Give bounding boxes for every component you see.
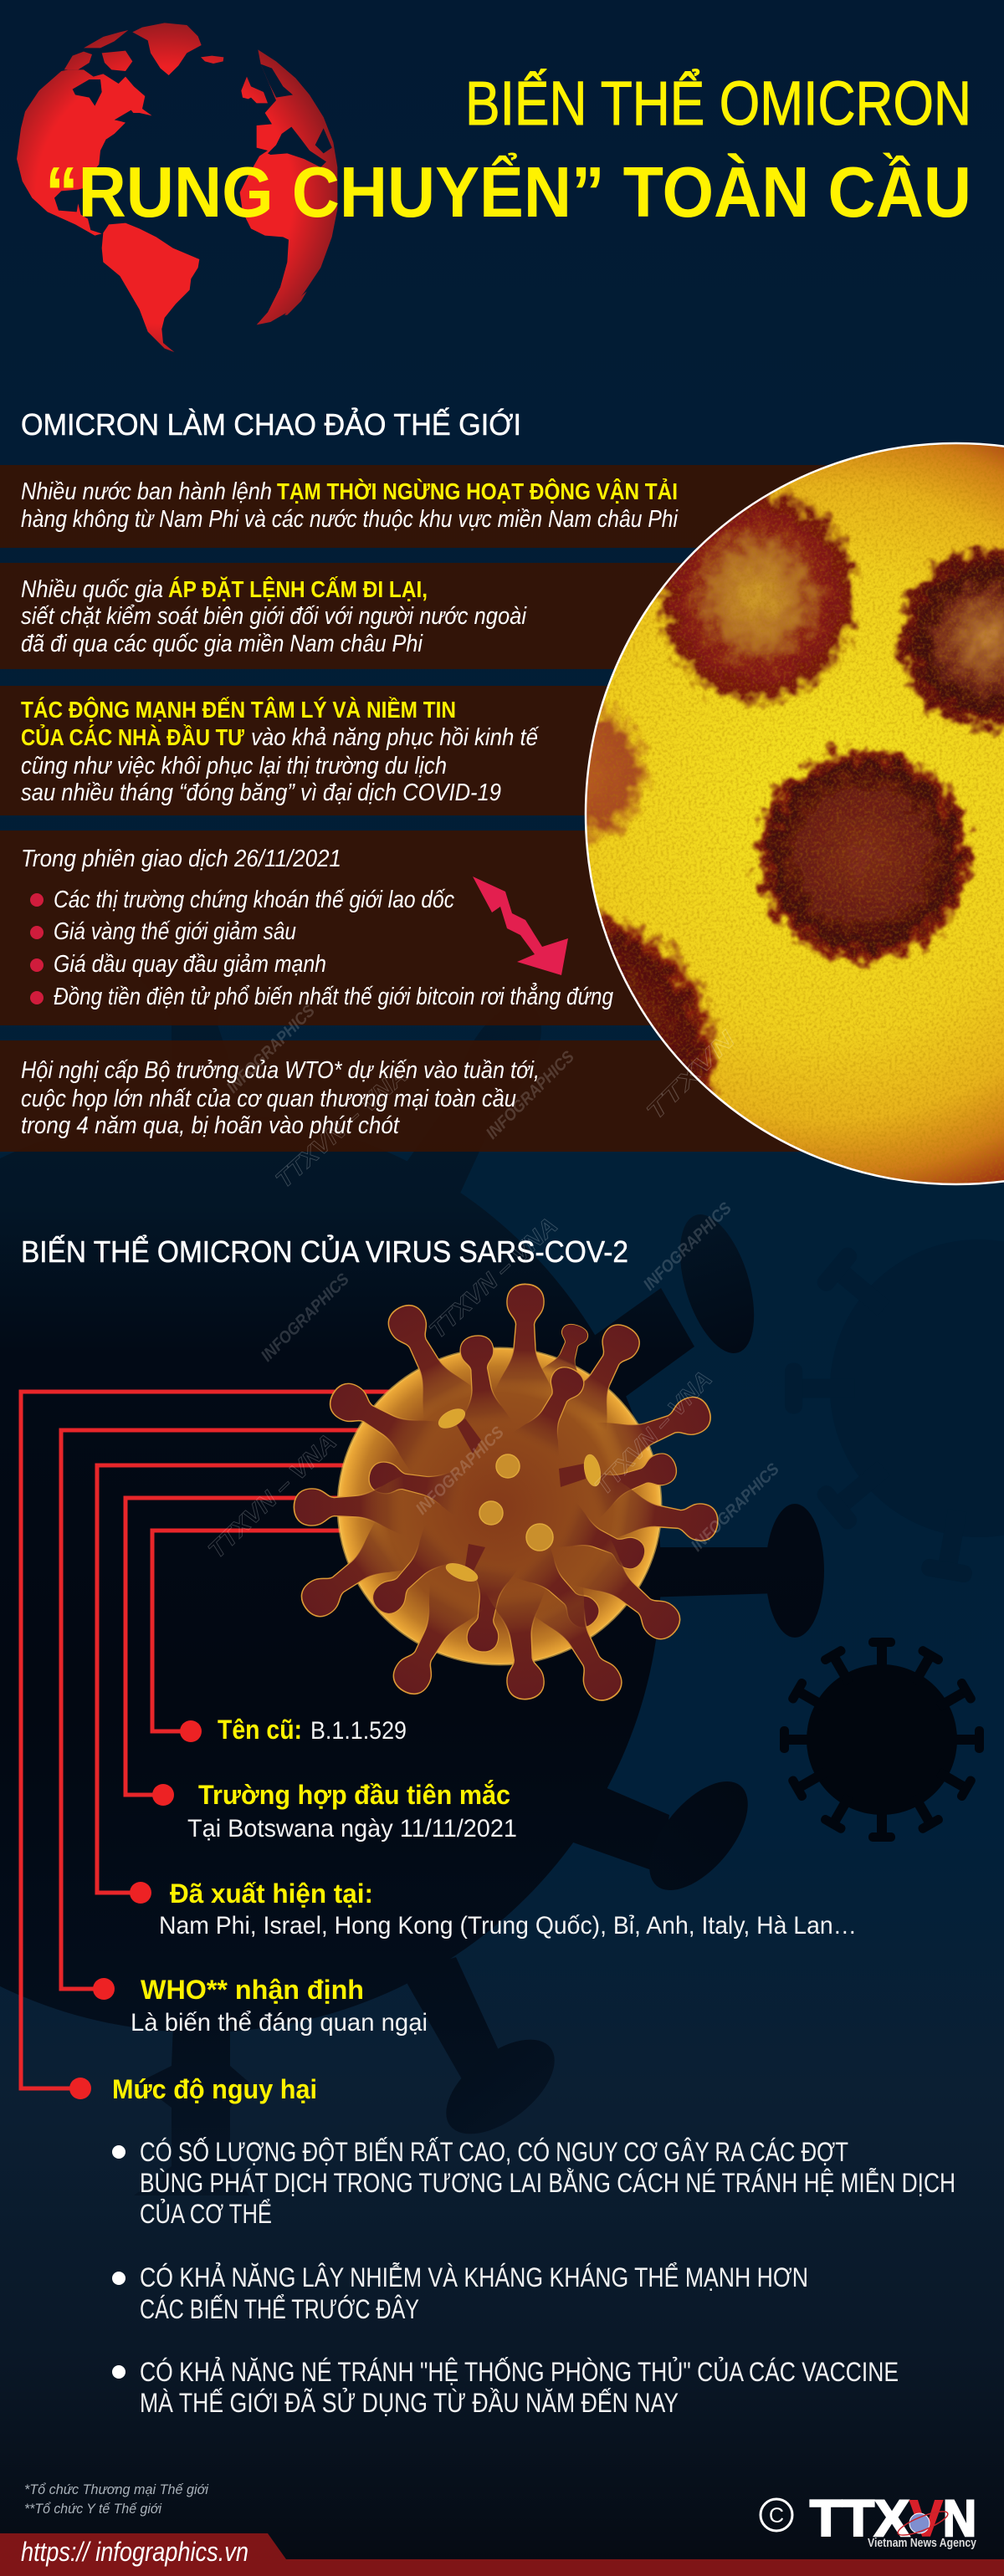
text block: investor confidence: TÁC ĐỘNG MẠNH ĐẾN TÂM LÝ VÀ NIỀM TIN (21, 696, 456, 723)
heading: Omicron làm chao đảo thế giới: OMICRON LÀM CHAO ĐẢO THẾ GIỚI (21, 407, 521, 442)
logo: copyright TTXVN Vietnam News Agency (761, 2490, 977, 2550)
text block: transport suspension (21, 478, 679, 533)
text block: investor confidence: sau nhiều tháng “đóng băng” vì đại dịch COVID-19 (21, 779, 501, 806)
footnotes (24, 2481, 209, 2517)
text block: transport suspension: hàng không từ Nam Phi và các nước thuộc khu vực miền Nam châu Phi (21, 506, 679, 533)
watermarks: TTXVN (641, 1025, 740, 1125)
watermarks: TTXVN – VNA (424, 1212, 562, 1343)
footer url: https:// infographics.vn (21, 2537, 248, 2567)
footnotes: **Tổ chức Y tế Thế giới (24, 2501, 162, 2517)
arrow: falling lightning arrow (473, 877, 568, 975)
background silhouette: small black virus (780, 1638, 984, 1842)
text block: investor confidence: cũng như việc khôi phục lại thị trường du lịch (21, 753, 447, 779)
heading: Biến thể Omicron của virus SARS-CoV-2: BIẾN THỂ OMICRON CỦA VIRUS SARS-COV-2 (21, 1234, 628, 1269)
text block: investor confidence: vào khả năng phục hồi kinh tế (251, 724, 540, 751)
list: danger points: CÓ KHẢ NĂNG LÂY NHIỄM VÀ KHÁNG KHÁNG THỂ MẠNH HƠN (140, 2262, 808, 2292)
text block: transport suspension: TẠM THỜI NGỪNG HOẠT ĐỘNG VẬN TẢI (277, 478, 678, 504)
text block: WTO conference: trong 4 năm qua, bị hoãn vào phút chót (21, 1112, 401, 1139)
label: Mức độ nguy hại: Mức độ nguy hại (112, 2074, 317, 2104)
logo: copyright TTXVN Vietnam News Agency: C (769, 2504, 784, 2527)
text block: WTO conference: Hội nghị cấp Bộ trưởng của WTO* dự kiến vào tuần tới, (21, 1057, 540, 1084)
logo: copyright TTXVN Vietnam News Agency: TTX (810, 2490, 909, 2547)
text block: travel bans: ÁP ĐẶT LỆNH CẤM ĐI LẠI, (168, 576, 428, 602)
label: Trường hợp đầu tiên mắc (152, 1780, 517, 1843)
background silhouette: dim virus, upper right (785, 1239, 1004, 1584)
label: Trường hợp đầu tiên mắc: Trường hợp đầu tiên mắc (198, 1780, 510, 1810)
connector lines from virus to labels (21, 1392, 393, 2088)
list: danger points: CÓ SỐ LƯỢNG ĐỘT BIẾN RẤT CAO, CÓ NGUY CƠ GÂY RA CÁC ĐỢT (140, 2137, 848, 2167)
text block: transport suspension: Nhiều nước ban hành lệnh (21, 478, 272, 505)
label: Tên cũ (180, 1715, 407, 1745)
text block: travel bans: đã đi qua các quốc gia miền Nam châu Phi (21, 631, 423, 657)
text block: travel bans (21, 576, 527, 657)
watermarks: INFOGRAPHICS (412, 1423, 508, 1519)
list: danger points (112, 2137, 955, 2418)
watermarks: INFOGRAPHICS (258, 1270, 353, 1366)
watermarks: TTXVN – VNA (270, 1062, 412, 1193)
footnotes: *Tổ chức Thương mại Thế giới (24, 2481, 209, 2497)
label: Tên cũ: B.1.1.529 (310, 1717, 407, 1745)
text block: WTO conference: cuộc họp lớn nhất của cơ quan thương mại toàn cầu (21, 1086, 516, 1112)
title (45, 69, 971, 233)
text block: trading session list: Giá dầu quay đầu giảm mạnh (54, 951, 326, 978)
text block: trading session list: Đồng tiền điện tử phổ biến nhất thế giới bitcoin rơi thẳng đứng (54, 982, 613, 1010)
label: Trường hợp đầu tiên mắc: Tại Botswana ngày 11/11/2021 (187, 1815, 517, 1843)
footer bar (0, 2533, 1004, 2576)
list: danger points: MÀ THẾ GIỚI ĐÃ SỬ DỤNG TỪ ĐẦU NĂM ĐẾN NAY (140, 2388, 679, 2418)
text block: WTO conference (21, 1057, 540, 1139)
logo: copyright TTXVN Vietnam News Agency: N (943, 2490, 976, 2547)
watermarks (203, 1001, 783, 1563)
photo: coronavirus micrograph in circle (584, 442, 1004, 1186)
label: WHO nhận định (93, 1975, 428, 2037)
text block: investor confidence (21, 696, 540, 806)
label: Đã xuất hiện tại (130, 1878, 857, 1940)
background silhouette: large dark virus (0, 954, 824, 2195)
text block: trading session list: Trong phiên giao dịch 26/11/2021 (21, 846, 341, 872)
label: Đã xuất hiện tại: Nam Phi, Israel, Hong Kong (Trung Quốc), Bỉ, Anh, Italy, Hà Lan… (159, 1912, 857, 1940)
text block: trading session list (21, 846, 613, 1010)
label: WHO nhận định: WHO** nhận định (141, 1975, 364, 2005)
watermarks: INFOGRAPHICS (688, 1459, 783, 1556)
watermarks: TTXVN – VNA (203, 1429, 341, 1563)
list: danger points: CỦA CƠ THỂ (140, 2199, 272, 2229)
label: Đã xuất hiện tại: Đã xuất hiện tại: (170, 1878, 373, 1909)
watermarks: TTXVN – VNA (590, 1366, 717, 1500)
icon: red globe (17, 23, 337, 352)
text block: trading session list: Giá vàng thế giới giảm sâu (54, 918, 296, 945)
label: WHO nhận định: Là biến thể đáng quan ngại (131, 2009, 428, 2037)
text block: travel bans: Nhiều quốc gia (21, 576, 163, 603)
text block: trading session list: Các thị trường chứng khoán thế giới lao dốc (54, 887, 454, 913)
text block: investor confidence: CỦA CÁC NHÀ ĐẦU TƯ (21, 723, 245, 750)
watermarks: INFOGRAPHICS (640, 1199, 735, 1295)
illustration: Omicron virus (288, 1284, 722, 1712)
watermarks: INFOGRAPHICS (223, 1001, 319, 1097)
label: Tên cũ: Tên cũ: (218, 1715, 302, 1745)
content bands (0, 465, 920, 1152)
logo: copyright TTXVN Vietnam News Agency: Vietnam News Agency (868, 2536, 977, 2550)
list: danger points: CÁC BIẾN THỂ TRƯỚC ĐÂY (140, 2294, 419, 2324)
text block: travel bans: siết chặt kiểm soát biên giới đối với người nước ngoài (21, 603, 527, 630)
watermarks: INFOGRAPHICS (483, 1047, 578, 1143)
logo: copyright TTXVN Vietnam News Agency: V (909, 2490, 943, 2547)
